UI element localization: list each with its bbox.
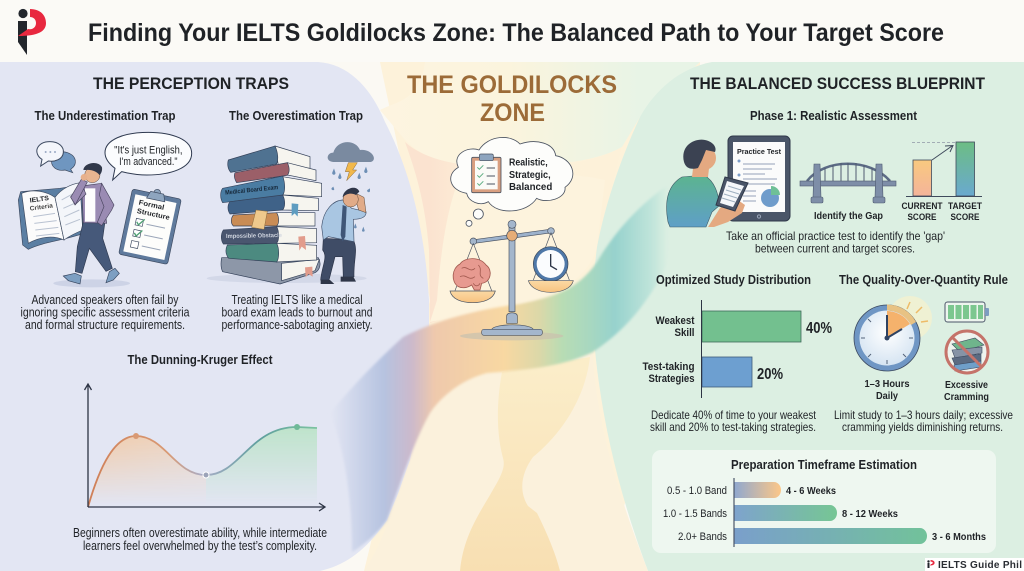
chart: current and target score: TARGET [948, 201, 982, 212]
figure: walking man [63, 163, 119, 284]
text: overestimation description: performance-sabotaging anxiety. [222, 318, 372, 332]
icon: clock [854, 296, 932, 371]
text: phase 1 description [726, 229, 945, 256]
icon: battery [945, 302, 989, 322]
icon: open criteria book [18, 183, 83, 249]
subheading: overestimation trap: The Overestimation Trap [229, 109, 363, 123]
bar: 1.0 - 1.5 bands: 8 - 12 Weeks [842, 508, 898, 520]
icon: formal structure clipboard [119, 184, 182, 264]
panel: preparation timeframe [652, 450, 996, 553]
chart: study distribution [642, 300, 832, 398]
text: Dunning-Kruger description [73, 526, 327, 553]
chart: study distribution: 40% [806, 320, 832, 337]
icon: open criteria book: Criteria [29, 202, 54, 213]
icon: large tablet: Practice Test [737, 147, 781, 156]
text: overestimation description: Treating IELTS like a medical [232, 293, 362, 307]
chart: study distribution: Weakest [656, 315, 695, 327]
text: phase 1 description: between current and target scores. [755, 242, 915, 256]
label: 1-3 hours daily: 1–3 Hours [864, 378, 910, 390]
chart: Dunning-Kruger curve [84, 384, 325, 511]
bar: 2.0+ bands: 3 - 6 Months [932, 531, 986, 543]
text: realistic strategic balanced: Realistic, [509, 157, 548, 168]
text: underestimation description [20, 293, 190, 332]
bar: 0.5 - 1.0 band: 0.5 - 1.0 Band [667, 485, 727, 497]
icon: stack of books [221, 146, 322, 284]
text: overestimation description: board exam leads to burnout and [222, 306, 373, 320]
label: excessive cramming [944, 379, 989, 403]
chart: current and target score [902, 142, 982, 223]
icon: clock on scale [533, 247, 568, 281]
speech bubble [105, 132, 192, 180]
footer: watermark: IELTS Guide Phil [938, 560, 1022, 571]
panel: balanced success blueprint [642, 75, 1013, 553]
subheading: Phase 1: Phase 1: Realistic Assessment [750, 109, 918, 123]
illustration: thought cloud and scale [450, 137, 573, 340]
text: study distribution description: Dedicate 40% of time to your weakest [651, 408, 817, 422]
subheading: underestimation trap: The Underestimation Trap [34, 109, 176, 123]
text: Dunning-Kruger description: learners feel overwhelmed by the test’s complexity. [83, 539, 317, 553]
illustration: overestimation trap: Impossible Obstacle [226, 233, 283, 240]
text: realistic strategic balanced: Balanced [509, 182, 552, 193]
heading: the Goldilocks zone: THE GOLDILOCKS [407, 71, 617, 99]
speech bubble: I'm advanced." [119, 156, 178, 168]
background: hourglass [460, 357, 590, 571]
background: rainbow ribbon [330, 185, 672, 552]
chart: current and target score: CURRENT [902, 201, 943, 212]
illustration: overestimation trap [207, 142, 374, 284]
text: study distribution description [650, 408, 817, 434]
logo: IELTS Guide Phil mark [18, 9, 46, 55]
icon: no cramming [945, 330, 989, 374]
background: centre column [364, 62, 700, 571]
label: 1-3 hours daily [864, 378, 910, 402]
figure: anxious man [321, 188, 366, 284]
chart: current and target score: SCORE [950, 212, 980, 223]
icon: brain [453, 259, 490, 290]
illustration: person with practice test [667, 136, 790, 227]
bar: 2.0+ bands [678, 528, 986, 544]
heading: preparation timeframe estimation: Preparation Timeframe Estimation [731, 458, 917, 472]
icon: bridge [800, 163, 896, 203]
icon: open criteria book: IELTS [29, 195, 50, 205]
text: quality rule description [834, 408, 1013, 434]
chart: study distribution: Strategies [648, 373, 694, 385]
panel: right green background [593, 62, 1024, 571]
chart: study distribution: Skill [674, 327, 694, 339]
background: cream lower centre [364, 352, 648, 571]
text: overestimation description [222, 293, 373, 332]
text: phase 1 description: Take an official practice test to identify the 'gap' [726, 229, 945, 243]
panel: left lavender background [0, 62, 429, 571]
heading: the Goldilocks zone: ZONE [480, 99, 545, 127]
title: Finding Your IELTS Goldilocks Zone: The Balanced Path to Your Target Score [88, 19, 944, 47]
chart: study distribution: 20% [757, 366, 783, 383]
thought cloud [451, 137, 573, 226]
text: underestimation description: and formal structure requirements. [25, 318, 185, 332]
illustration: overestimation trap: Medical Board Exam [225, 184, 279, 197]
text: underestimation description: Advanced speakers often fail by [32, 293, 179, 307]
label: excessive cramming: Excessive [945, 379, 988, 391]
speech bubble: "It's just English, [114, 145, 182, 157]
bar: 0.5 - 1.0 band [667, 482, 836, 498]
icon: chat bubbles [37, 142, 75, 173]
icon: checklist clipboard [472, 154, 501, 193]
subheading: optimized study distribution: Optimized Study Distribution [656, 273, 811, 287]
text: Dunning-Kruger description: Beginners often overestimate ability, while intermediate [73, 526, 327, 540]
label: excessive cramming: Cramming [944, 391, 989, 403]
icon: balance scale [450, 220, 573, 340]
text: study distribution description: skill and 20% to test-taking strategies. [650, 420, 816, 434]
subheading: Dunning-Kruger: The Dunning-Kruger Effect [128, 353, 273, 367]
chart: study distribution: Test-taking [642, 361, 694, 373]
label: identify the gap: Identify the Gap [814, 211, 883, 222]
illustration: underestimation trap [18, 132, 192, 287]
header band [0, 0, 1024, 62]
heading: the perception traps: THE PERCEPTION TRAPS [93, 75, 289, 93]
panel: perception traps [18, 75, 374, 553]
label: 1-3 hours daily: Daily [876, 390, 898, 402]
heading: the balanced success blueprint: THE BALANCED SUCCESS BLUEPRINT [690, 75, 985, 93]
bar: 0.5 - 1.0 band: 4 - 6 Weeks [786, 485, 836, 497]
text: underestimation description: ignoring specific assessment criteria [20, 306, 190, 320]
bar: 1.0 - 1.5 bands: 1.0 - 1.5 Bands [663, 508, 727, 520]
text: realistic strategic balanced: Strategic, [509, 170, 551, 181]
icon: storm cloud [328, 142, 374, 232]
icon: formal structure clipboard: Structure [136, 208, 170, 222]
text: realistic strategic balanced [509, 157, 552, 193]
chart: current and target score: SCORE [908, 212, 936, 223]
figure: student [667, 140, 748, 227]
bar: 2.0+ bands: 2.0+ Bands [678, 531, 727, 543]
subheading: quality over quantity: The Quality-Over-Quantity Rule [839, 273, 1008, 287]
bar: 1.0 - 1.5 bands [663, 505, 898, 521]
heading: the Goldilocks zone [407, 71, 617, 127]
icon: formal structure clipboard: Formal [138, 200, 165, 212]
